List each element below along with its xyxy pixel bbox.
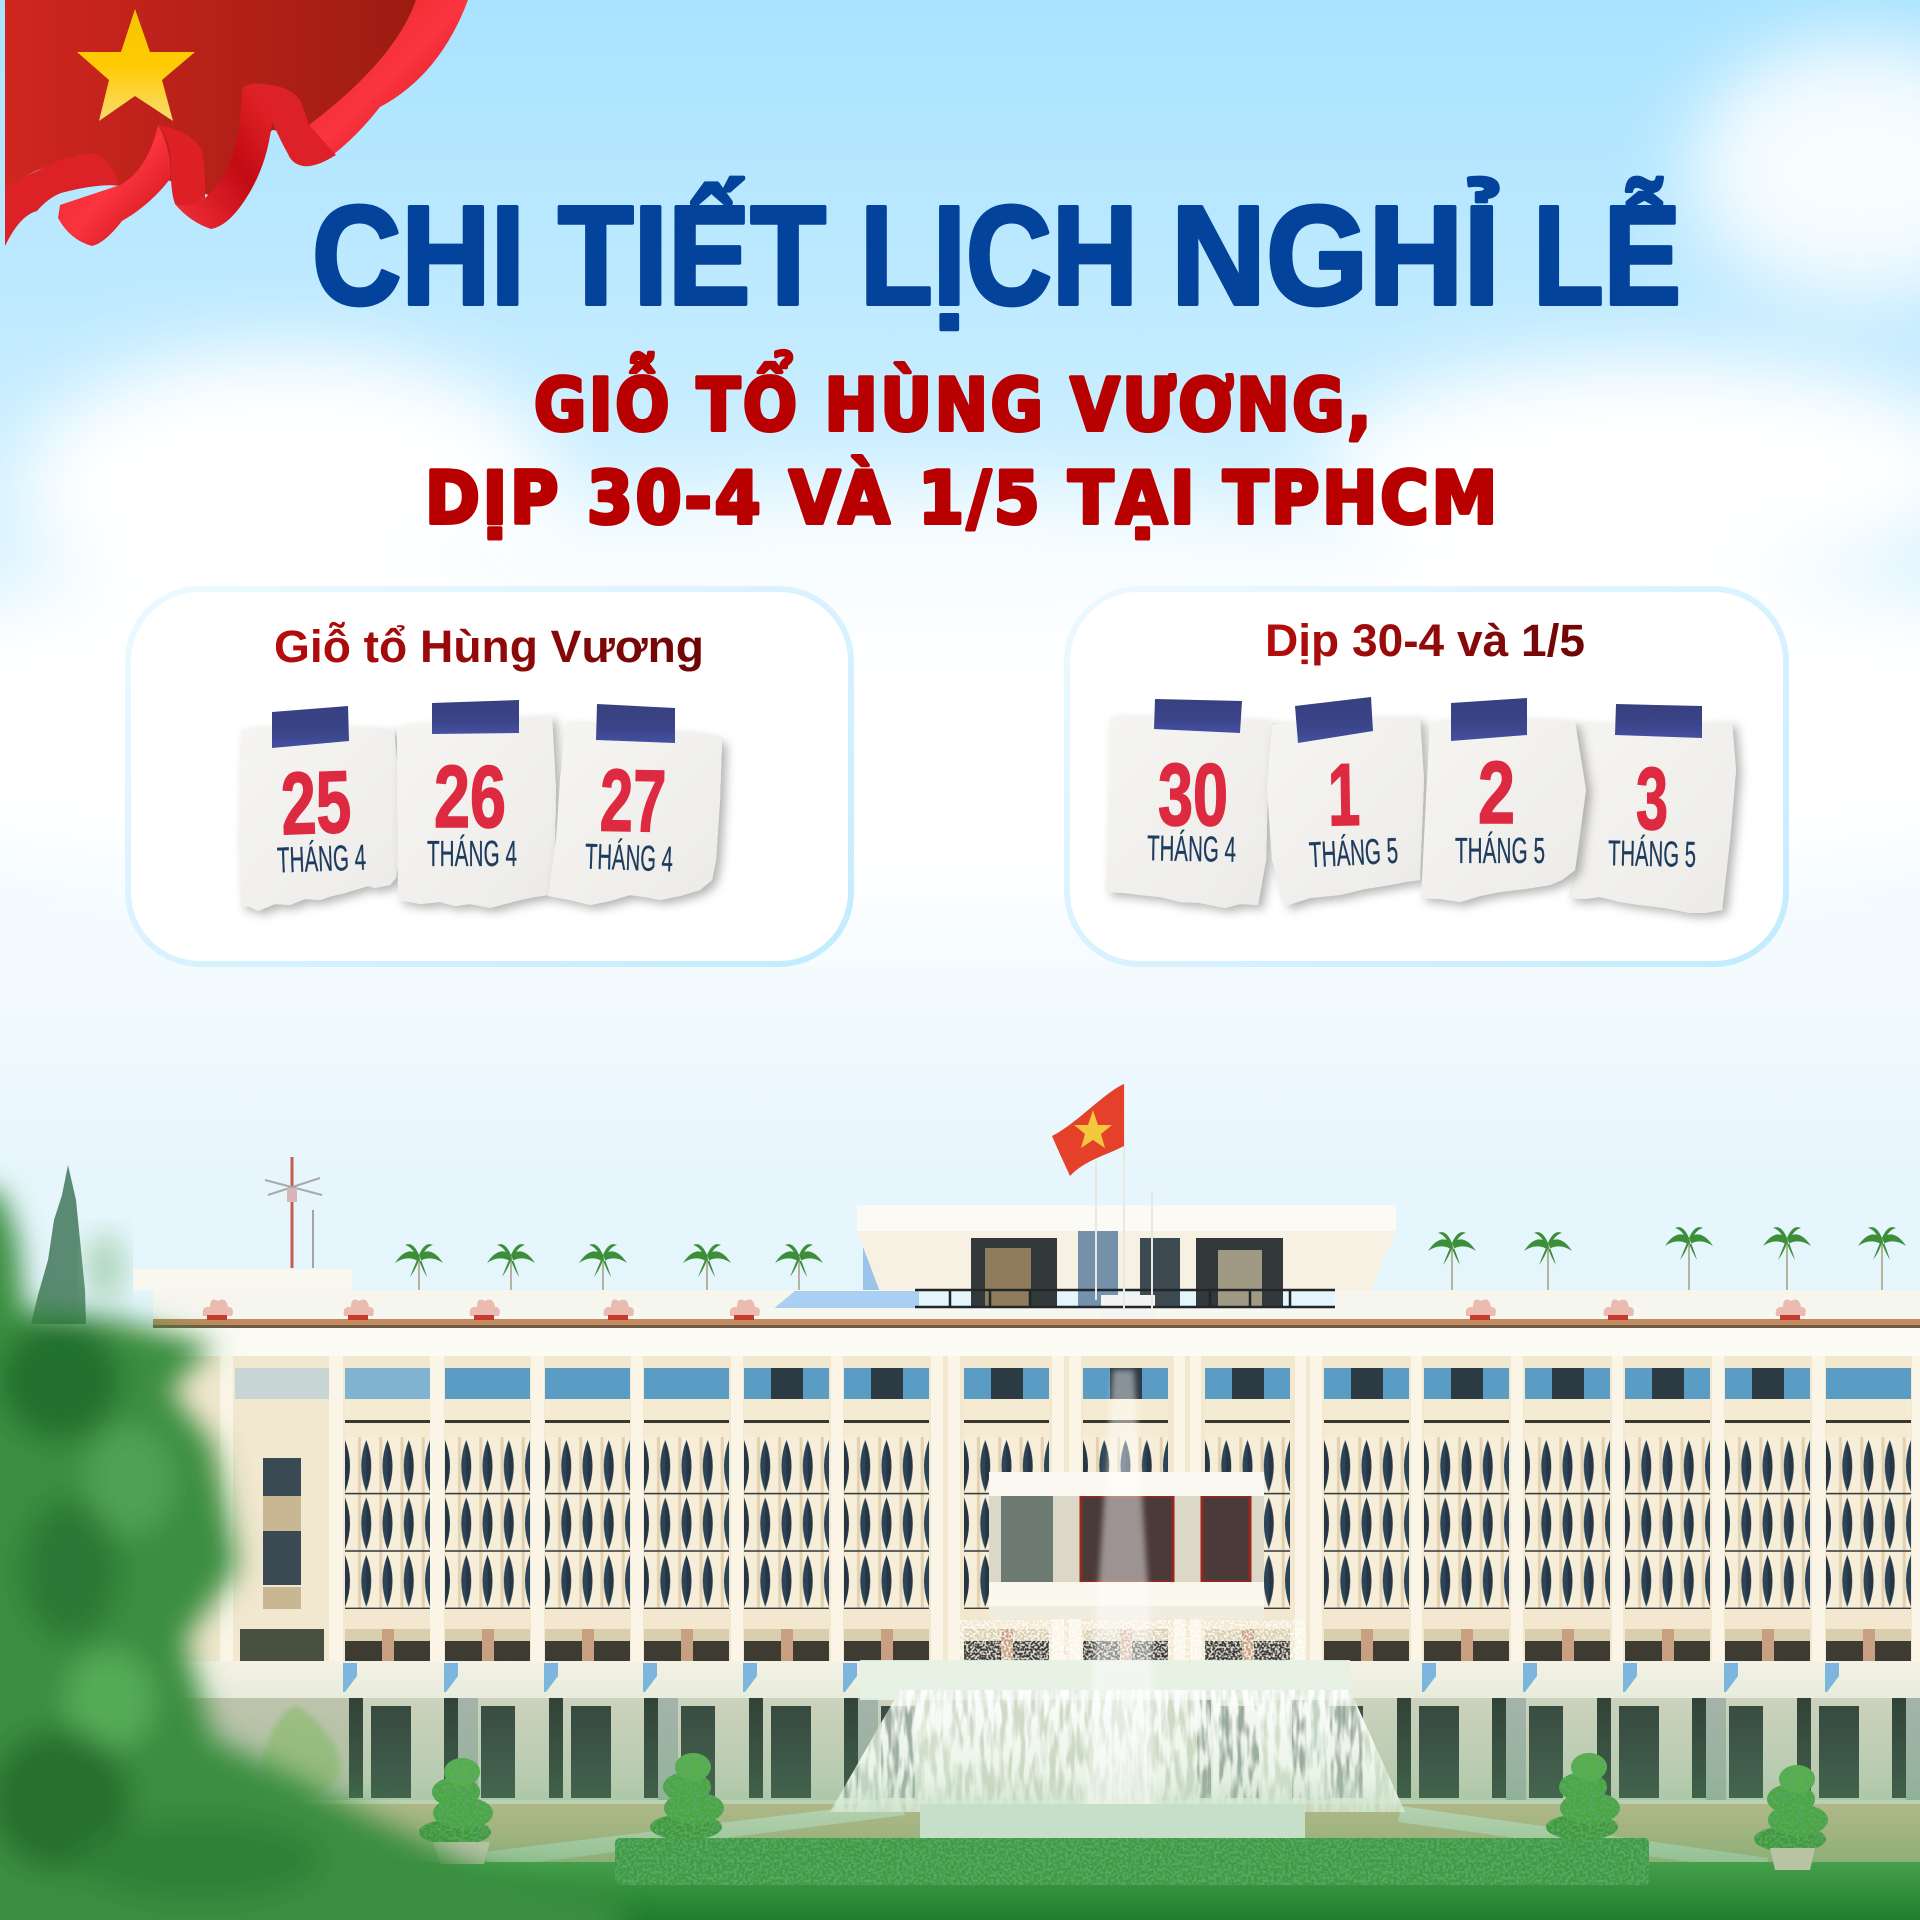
ribbon long strand (175, 88, 272, 229)
calendar sheet 26: 26 (434, 747, 506, 846)
subtitle (425, 352, 1500, 540)
hedge (615, 1838, 1649, 1885)
flag cloth (1052, 1084, 1124, 1176)
calendar sheet 25: 25 (279, 752, 353, 853)
pavilion railing (915, 1290, 1335, 1307)
rooftop palms (395, 1227, 1906, 1307)
panel box (1067, 589, 1786, 964)
calendar sheet 25: THÁNG 4 (276, 836, 367, 881)
calendar sheet 1: 30: 30 (1158, 745, 1228, 844)
subtitle line 1: GIỖ TỔ HÙNG VƯƠNG, (534, 352, 1374, 447)
flag on palace (1052, 1084, 1152, 1310)
panel heading: Giỗ tổ Hùng Vương (274, 621, 704, 672)
topiary bushes (419, 1753, 1828, 1870)
ribbon lower loop (58, 125, 170, 246)
calendar sheet 2: 1: 1 (1327, 745, 1361, 844)
title: CHI (312, 176, 525, 334)
facade wall (120, 1356, 1920, 1666)
gold star (77, 9, 195, 121)
antenna tower (265, 1157, 322, 1268)
calendar sheet 26 (397, 700, 556, 908)
fountain base band (860, 1660, 1350, 1700)
calendar sheet 4: 3: THÁNG 5 (1608, 832, 1696, 875)
pine tree (31, 1165, 86, 1324)
calendar sheet 4: 3: 3 (1636, 749, 1668, 848)
rooftop plants (203, 1299, 1806, 1320)
column shadows (343, 1663, 1839, 1692)
calendar sheet 1: 30: THÁNG 4 (1147, 827, 1236, 870)
lower band (120, 1661, 1920, 1698)
ribbon edge strip (309, 0, 468, 154)
ribbon second curl (158, 125, 205, 205)
window bays with lattice screens (345, 1368, 1911, 1661)
calendar sheet 26: THÁNG 4 (427, 833, 517, 874)
calendar sheet 27 (548, 704, 722, 905)
corner flag ribbon (5, 0, 468, 246)
panel heading: Dịp 30-4 và 1/5 (1265, 615, 1585, 666)
cornice (90, 1327, 1920, 1356)
faint tree blob near pine (85, 1233, 125, 1303)
building: landmark palace illustration (31, 1157, 1920, 1872)
title: NGHỈ (1171, 176, 1500, 334)
title: TIẾT (558, 176, 826, 334)
calendar sheet 3: 2: 2 (1478, 743, 1515, 842)
calendar sheet 2: 1: THÁNG 5 (1308, 830, 1399, 875)
fountain spray mist (960, 1620, 1305, 1670)
subtitle line 2: DỊP 30-4 VÀ 1/5 TẠI TPHCM (425, 456, 1500, 540)
lawn (0, 1862, 1920, 1920)
fountain (830, 1370, 1405, 1840)
fountain streaks (830, 1690, 1405, 1812)
ribbon left tail (5, 153, 119, 246)
side wing windows (235, 1368, 430, 1661)
blurred foreground tree (0, 1190, 620, 1920)
calendar sheet 1: 30 (1106, 699, 1272, 908)
green ground haze (0, 1660, 1920, 1920)
central balcony (989, 1472, 1264, 1619)
panel: Giỗ tổ Hùng Vương (128, 589, 851, 964)
ribbon top curl (242, 84, 336, 166)
panel box (128, 589, 851, 964)
calendar sheet 27: 27 (599, 750, 667, 851)
flag poles (1096, 1084, 1152, 1310)
flag star (1074, 1110, 1112, 1148)
title: LỄ (1533, 176, 1681, 334)
small tree (261, 1705, 341, 1803)
calendar sheet 2: 1 (1267, 697, 1424, 906)
fountain fan (830, 1690, 1405, 1812)
stone retaining wall (250, 1800, 1920, 1872)
panel: Dịp 30-4 và 1/5 (1067, 589, 1786, 964)
columns (220, 1356, 1920, 1681)
flag body (5, 0, 418, 196)
calendar sheet 27: THÁNG 4 (584, 835, 674, 880)
clouds (0, 40, 1920, 920)
fountain main jet (1085, 1370, 1155, 1810)
calendar sheet 3: 2: THÁNG 5 (1455, 830, 1545, 871)
title: LỊCH (860, 176, 1138, 334)
roof terrace (133, 1269, 1920, 1327)
title (312, 176, 1681, 334)
ground floor (150, 1698, 1920, 1803)
fountain basin (920, 1804, 1305, 1840)
calendar sheet 4: 3 (1568, 704, 1736, 913)
calendar sheet 3: 2 (1421, 698, 1586, 902)
upper pavilion (857, 1205, 1396, 1308)
calendar sheet 25 (239, 706, 404, 911)
